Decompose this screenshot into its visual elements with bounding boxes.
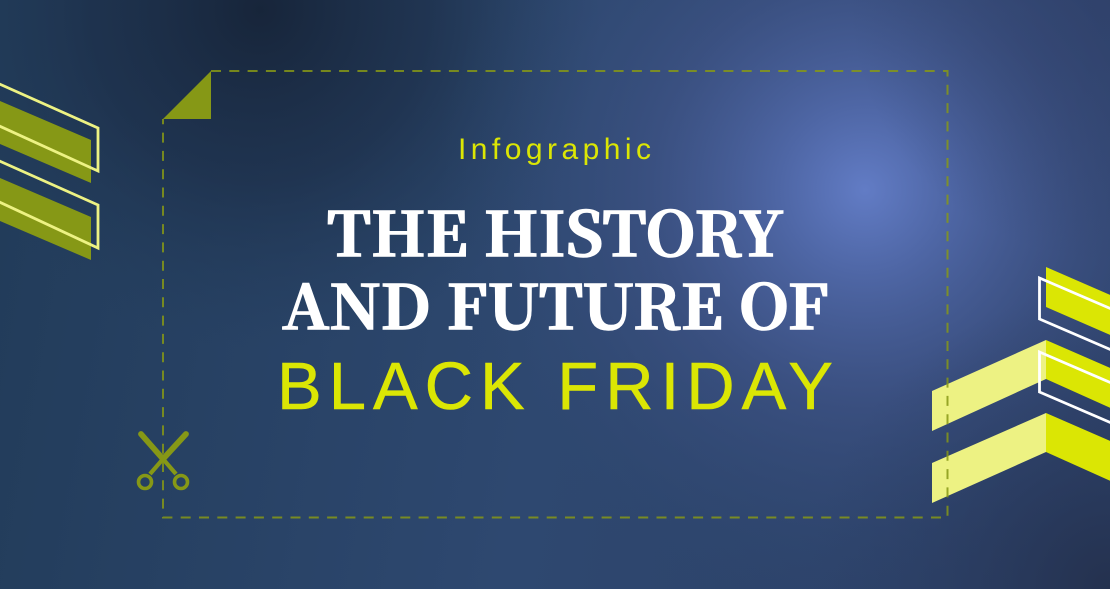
left chevron stripes	[0, 82, 98, 260]
label: Infographic: Infographic	[458, 133, 651, 166]
right chevron stripes	[932, 267, 1110, 503]
title: the history and future of: THE HISTORY	[327, 187, 783, 274]
title: black friday: BLACK FRIDAY	[277, 349, 833, 424]
title: the history and future of: AND FUTURE OF	[282, 260, 829, 347]
dashed coupon border	[163, 71, 948, 518]
title: the history and future of	[282, 187, 829, 347]
folded coupon corner	[163, 71, 211, 119]
icon: scissors	[138, 434, 188, 488]
